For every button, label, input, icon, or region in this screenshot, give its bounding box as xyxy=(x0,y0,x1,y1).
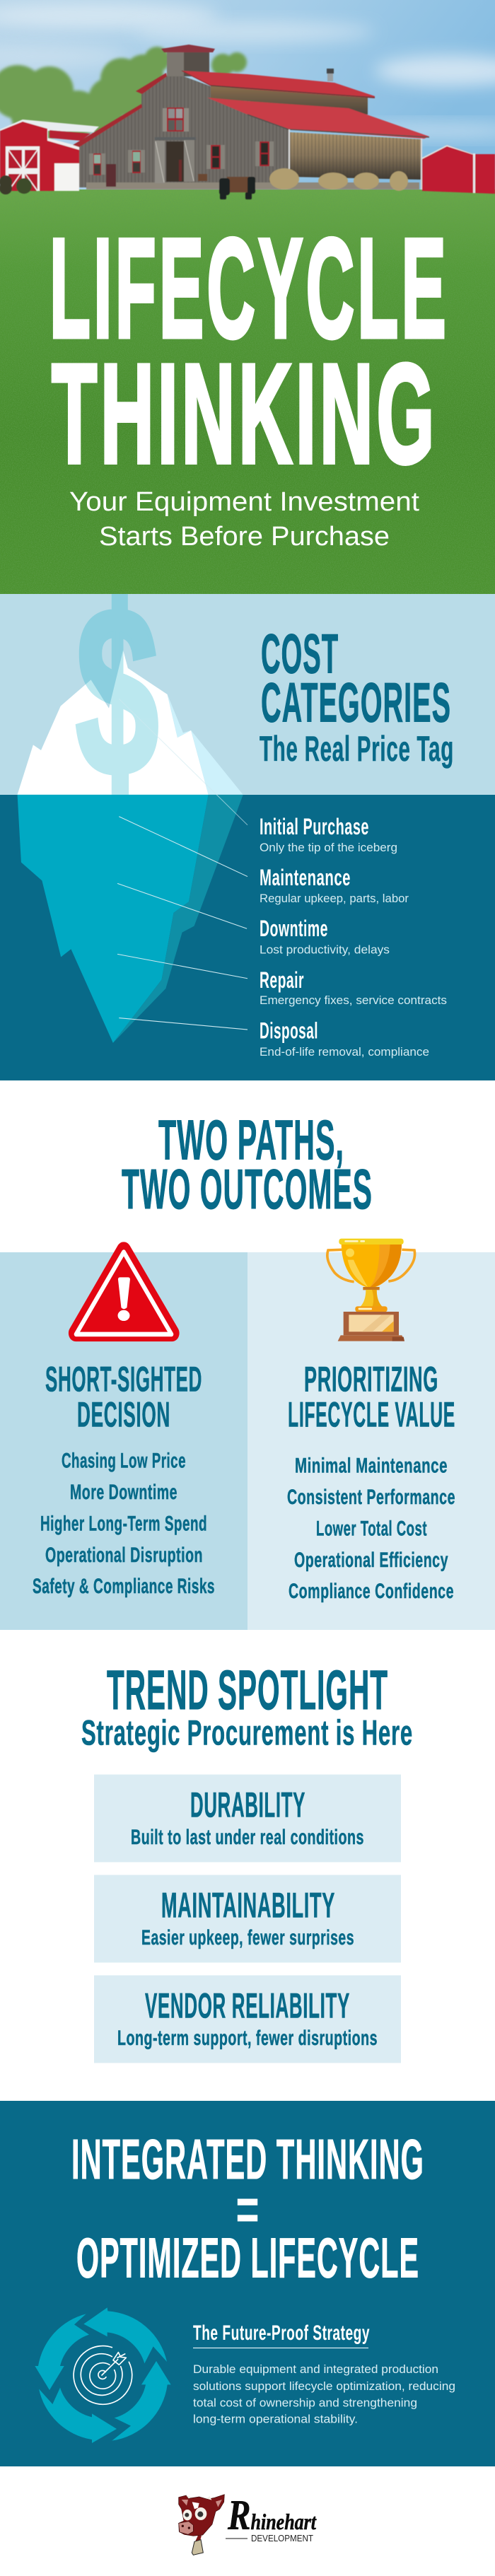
farm buildings xyxy=(0,45,495,199)
iceberg underwater mass xyxy=(18,795,209,1043)
leader lines xyxy=(117,699,248,1030)
main barn xyxy=(73,45,429,191)
icon: gold trophy xyxy=(327,1239,415,1341)
dollar sign: $ xyxy=(76,557,158,825)
item: maintenance xyxy=(260,865,409,905)
heading: short-sighted decision: DECISION xyxy=(77,1394,170,1434)
red metal roofs xyxy=(182,71,375,98)
item: disposal xyxy=(260,1018,429,1059)
iceberg tip xyxy=(18,650,209,795)
heading: cost categories: COST xyxy=(261,622,339,684)
cycle arrows xyxy=(35,2307,171,2443)
hero subtitle: Your Equipment Investment xyxy=(69,487,419,517)
panel: short-sighted decision xyxy=(0,1250,248,1630)
tractor xyxy=(198,174,255,199)
panel: integrated thinking xyxy=(0,2101,495,2466)
item: maintenance: Regular upkeep, parts, labor xyxy=(260,892,409,905)
icon: warning triangle xyxy=(76,1250,172,1334)
strategy body text: long-term operational stability. xyxy=(193,2413,358,2425)
heading: short-sighted decision xyxy=(45,1359,202,1434)
item: downtime: Downtime xyxy=(260,916,328,941)
item: initial purchase: Initial Purchase xyxy=(260,814,369,839)
list: lifecycle value outcomes xyxy=(287,1454,455,1603)
list: short-sighted outcomes: More Downtime xyxy=(70,1481,177,1504)
heading: short-sighted decision: SHORT-SIGHTED xyxy=(45,1359,202,1399)
upper window xyxy=(163,107,189,132)
strategy title: The Future-Proof Strategy xyxy=(193,2321,370,2345)
list: short-sighted outcomes: Higher Long-Term Spend xyxy=(40,1512,207,1536)
equation headline: = xyxy=(236,2176,259,2243)
strategy body text xyxy=(193,2363,455,2425)
card: vendor reliability xyxy=(94,1976,401,2063)
card: durability: DURABILITY xyxy=(190,1785,305,1824)
list: short-sighted outcomes: Safety & Compliance Risks xyxy=(33,1575,215,1598)
sky xyxy=(0,0,495,194)
hero photo panel: farm barn on green field xyxy=(0,0,495,594)
hero subtitle xyxy=(69,487,419,552)
item: maintenance: Maintenance xyxy=(260,865,351,890)
card: maintainability: Easier upkeep, fewer surprises xyxy=(141,1926,354,1950)
heading: two paths two outcomes xyxy=(122,1109,373,1220)
hero title xyxy=(50,209,449,493)
card: durability: Built to last under real conditions xyxy=(131,1826,364,1849)
card: maintainability: MAINTAINABILITY xyxy=(161,1885,335,1925)
logo wordmark: Rhinehart xyxy=(227,2492,317,2539)
iceberg underwater shadow xyxy=(113,795,243,1043)
item: repair xyxy=(260,967,447,1007)
item: initial purchase: Only the tip of the iceberg xyxy=(260,841,397,854)
cupola xyxy=(161,45,215,76)
item: downtime: Lost productivity, delays xyxy=(260,943,390,956)
ornamental grasses xyxy=(269,168,408,191)
logo wordmark: DEVELOPMENT xyxy=(251,2533,313,2543)
heading: cost categories xyxy=(260,622,454,769)
list: short-sighted outcomes: Operational Disruption xyxy=(45,1544,203,1567)
item: disposal: End-of-life removal, compliance xyxy=(260,1046,429,1059)
list: lifecycle value outcomes: Lower Total Cost xyxy=(316,1517,427,1540)
panel: cost categories xyxy=(0,557,495,1080)
strategy body text: total cost of ownership and strengthening xyxy=(193,2397,417,2410)
strategy body text: solutions support lifecycle optimization, reducing xyxy=(193,2380,455,2393)
left red barn xyxy=(0,120,99,194)
logo: Rhinehart Development xyxy=(179,2492,317,2555)
item: disposal: Disposal xyxy=(260,1018,318,1044)
card: durability xyxy=(94,1775,401,1863)
heading: trend spotlight xyxy=(81,1658,413,1752)
card: maintainability xyxy=(94,1875,401,1963)
item: repair: Repair xyxy=(260,967,304,993)
list: short-sighted outcomes xyxy=(33,1450,215,1598)
trees xyxy=(0,47,247,141)
strategy body text: Durable equipment and integrated production xyxy=(193,2363,438,2376)
grass field xyxy=(0,190,495,594)
barn door xyxy=(155,137,196,183)
side windows xyxy=(89,141,274,175)
list: short-sighted outcomes: Chasing Low Price xyxy=(62,1450,186,1472)
item: initial purchase xyxy=(260,814,397,854)
icon: cow head with bell xyxy=(179,2495,224,2555)
item: downtime xyxy=(260,916,390,956)
cost list xyxy=(260,814,447,1059)
hero subtitle: Starts Before Purchase xyxy=(99,522,390,552)
item: repair: Emergency fixes, service contracts xyxy=(260,994,447,1007)
icon: cycle arrows around target xyxy=(35,2307,171,2443)
right red barn xyxy=(422,145,495,194)
iceberg with dollar sign xyxy=(18,557,248,1043)
heading: prioritizing lifecycle value xyxy=(288,1359,455,1434)
panel: prioritizing lifecycle value xyxy=(248,1239,495,1630)
equation headline xyxy=(71,2128,424,2290)
target xyxy=(74,2346,132,2404)
iceberg lit face xyxy=(168,694,243,795)
